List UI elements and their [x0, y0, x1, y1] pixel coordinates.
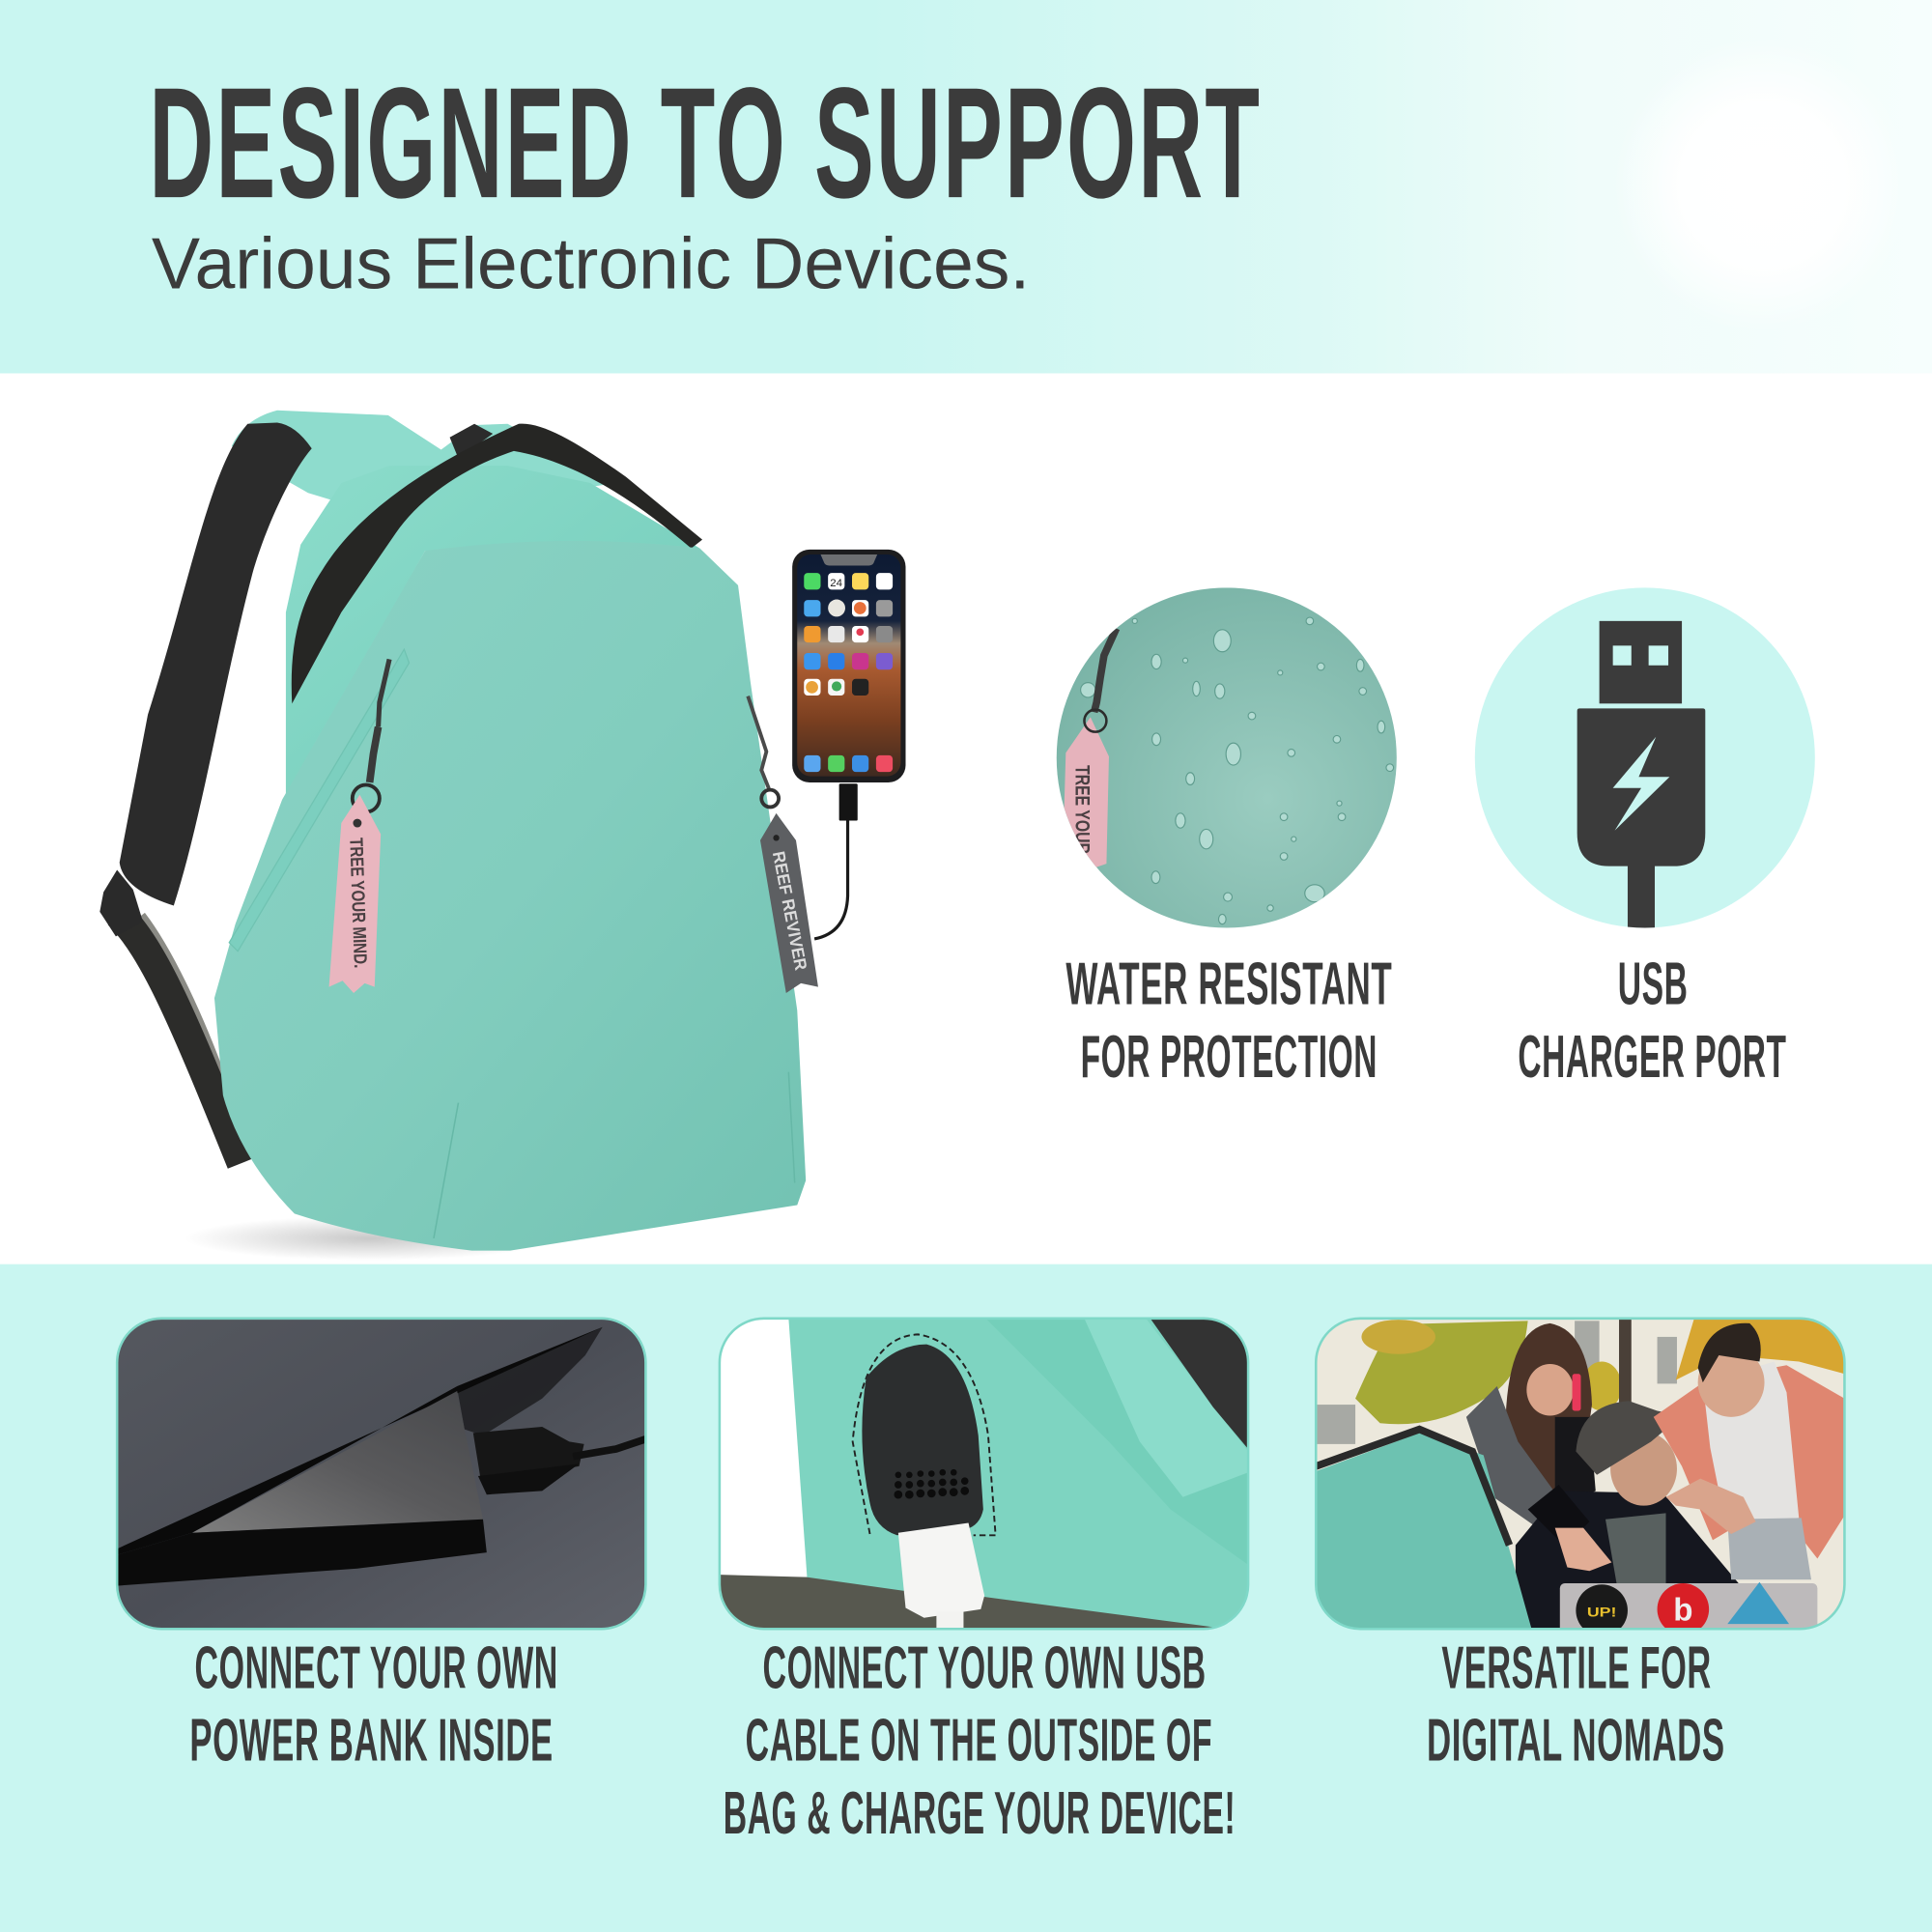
port dots — [895, 1469, 969, 1499]
woman leather arm — [1466, 1386, 1567, 1534]
usb plug shadow — [478, 1466, 575, 1495]
tag text: TREE YOUR — [1071, 765, 1095, 854]
caption: power bank: CONNECT YOUR OWN — [195, 1634, 558, 1701]
cable — [814, 820, 848, 939]
phone screen — [797, 554, 900, 777]
label: for protection: FOR PROTECTION — [1081, 1023, 1378, 1091]
power bank top — [192, 1391, 483, 1533]
mesh shoulder strap — [120, 423, 312, 906]
backpack illustration — [99, 411, 818, 1261]
pink tag — [329, 795, 381, 993]
tree trunk — [1619, 1319, 1632, 1403]
black usb port — [862, 1345, 983, 1535]
beats sticker — [1658, 1583, 1709, 1635]
woman top — [1555, 1417, 1596, 1509]
mint shoulder top — [232, 411, 616, 518]
woman sleeve — [1528, 1485, 1589, 1547]
fabric shadow — [457, 1327, 603, 1435]
photo: digital nomads — [1316, 1319, 1844, 1636]
phone body — [792, 550, 906, 782]
front zipper seam — [229, 649, 409, 952]
boiler up sticker: UP! — [1587, 1604, 1616, 1619]
right man hoodie — [1703, 1361, 1799, 1521]
lower strap — [118, 914, 242, 1163]
notch — [820, 554, 877, 565]
seated man cap — [1576, 1401, 1682, 1475]
mesh corner — [1151, 1319, 1248, 1449]
strap buckle — [99, 870, 143, 936]
caption: digital nomads: VERSATILE FOR — [1441, 1634, 1712, 1701]
pink tag close-up — [1064, 717, 1109, 867]
caption: usb cable: BAG & CHARGE YOUR DEVICE! — [724, 1779, 1236, 1847]
right man shirt — [1654, 1365, 1844, 1559]
right man arm — [1665, 1479, 1756, 1534]
bag base seam — [434, 1072, 795, 1238]
seated man torso — [1516, 1491, 1739, 1629]
zipper clasp — [1094, 629, 1117, 712]
subtitle: Various Electronic Devices. — [152, 222, 1030, 303]
pink tag: TREE YOUR MIND. — [345, 838, 370, 969]
water resistant label: WATER RESISTANT — [1065, 951, 1392, 1018]
white cable — [936, 1611, 963, 1632]
bag zipper edge — [1316, 1430, 1509, 1545]
tag ring — [1084, 710, 1106, 732]
right man face — [1698, 1348, 1765, 1417]
feature: usb charger — [1475, 587, 1815, 1018]
woman hand — [1555, 1528, 1611, 1571]
water droplets — [1081, 617, 1394, 924]
caption: usb cable — [724, 1634, 1236, 1847]
front of bag — [214, 541, 806, 1251]
strap fold — [985, 1319, 1248, 1565]
white background — [720, 1319, 807, 1577]
ground shadow — [185, 1216, 554, 1261]
caption: power bank: POWER BANK INSIDE — [189, 1707, 554, 1775]
right zipper pull — [748, 696, 779, 807]
white usb plug — [898, 1523, 984, 1618]
right man hair — [1698, 1323, 1761, 1382]
photo: power bank — [117, 1319, 645, 1629]
icon: usb plug — [1577, 621, 1705, 929]
photo: usb port on bag — [720, 1319, 1248, 1632]
feature: water resistant — [1056, 587, 1397, 1018]
woman face — [1526, 1364, 1574, 1416]
left tree — [1355, 1320, 1622, 1424]
boiler up sticker — [1576, 1584, 1628, 1636]
app icons — [804, 573, 893, 772]
building windows — [1316, 1321, 1677, 1444]
beats sticker: b — [1673, 1592, 1692, 1628]
left zipper pull — [353, 659, 389, 812]
header band — [0, 0, 1932, 373]
caption: usb cable: CABLE ON THE OUTSIDE OF — [746, 1707, 1212, 1775]
bottom band — [0, 1264, 1932, 1932]
caption: power bank — [189, 1634, 558, 1775]
inner strap webbing — [450, 424, 493, 458]
bag in photo — [1316, 1433, 1531, 1629]
phone in hand — [1573, 1374, 1580, 1410]
gray webbing — [720, 1575, 1227, 1629]
app icons: 24 — [830, 578, 843, 589]
seated man face — [1610, 1432, 1677, 1506]
laptop — [1560, 1583, 1817, 1633]
mountain sticker — [1727, 1582, 1789, 1624]
right man jeans — [1727, 1518, 1811, 1579]
usb plug — [473, 1427, 584, 1479]
cable — [573, 1439, 645, 1457]
back panel of bag — [286, 466, 699, 800]
caption: usb cable: CONNECT YOUR OWN USB — [763, 1634, 1207, 1701]
woman hair — [1506, 1323, 1592, 1497]
caption: digital nomads — [1427, 1634, 1725, 1775]
seated man tshirt — [1605, 1513, 1665, 1583]
power bank front — [117, 1520, 487, 1586]
usb label: USB — [1618, 951, 1688, 1018]
connector — [839, 783, 858, 820]
gray tag: REEF REVIVER — [769, 850, 810, 972]
stitch outline — [853, 1334, 996, 1535]
black carry handle — [292, 424, 702, 703]
gray tag — [760, 813, 818, 993]
phone with cable — [792, 550, 906, 939]
right tree — [1676, 1319, 1844, 1380]
pocket opening — [117, 1327, 603, 1555]
usb circle — [1475, 587, 1815, 927]
water resistant circle — [1056, 587, 1397, 927]
